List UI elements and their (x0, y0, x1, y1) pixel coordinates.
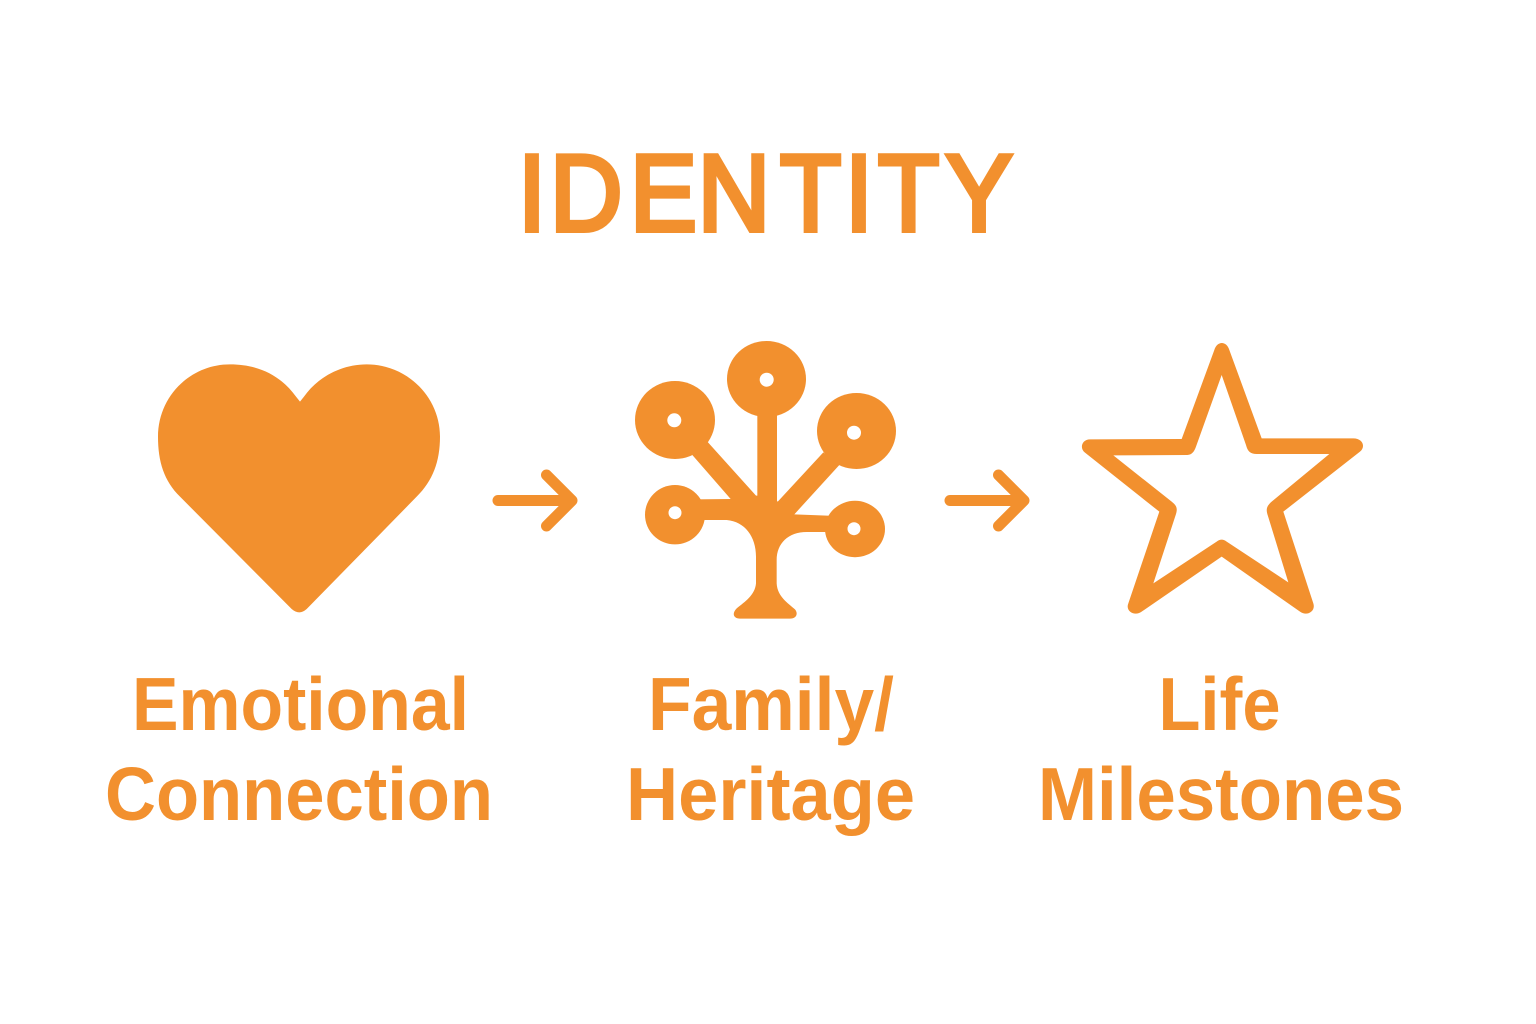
arrow: heart to tree (498, 475, 572, 526)
title: IDENTITY (518, 133, 1013, 254)
label: Life Milestones: Life (1158, 662, 1280, 746)
label: Life Milestones: Milestones (1038, 752, 1404, 836)
label: Emotional Connection: Emotional (132, 662, 469, 746)
label: Family/Heritage: Family/ (648, 662, 894, 746)
icon: star (1082, 343, 1363, 614)
label: Family/Heritage: Heritage (626, 752, 915, 836)
icon: family tree (635, 341, 896, 619)
arrow: tree to star (950, 475, 1024, 526)
label: Emotional Connection (105, 662, 493, 836)
icon: heart (158, 364, 440, 612)
label: Family/Heritage (626, 662, 915, 836)
label: Emotional Connection: Connection (105, 752, 493, 836)
label: Life Milestones (1038, 662, 1404, 836)
